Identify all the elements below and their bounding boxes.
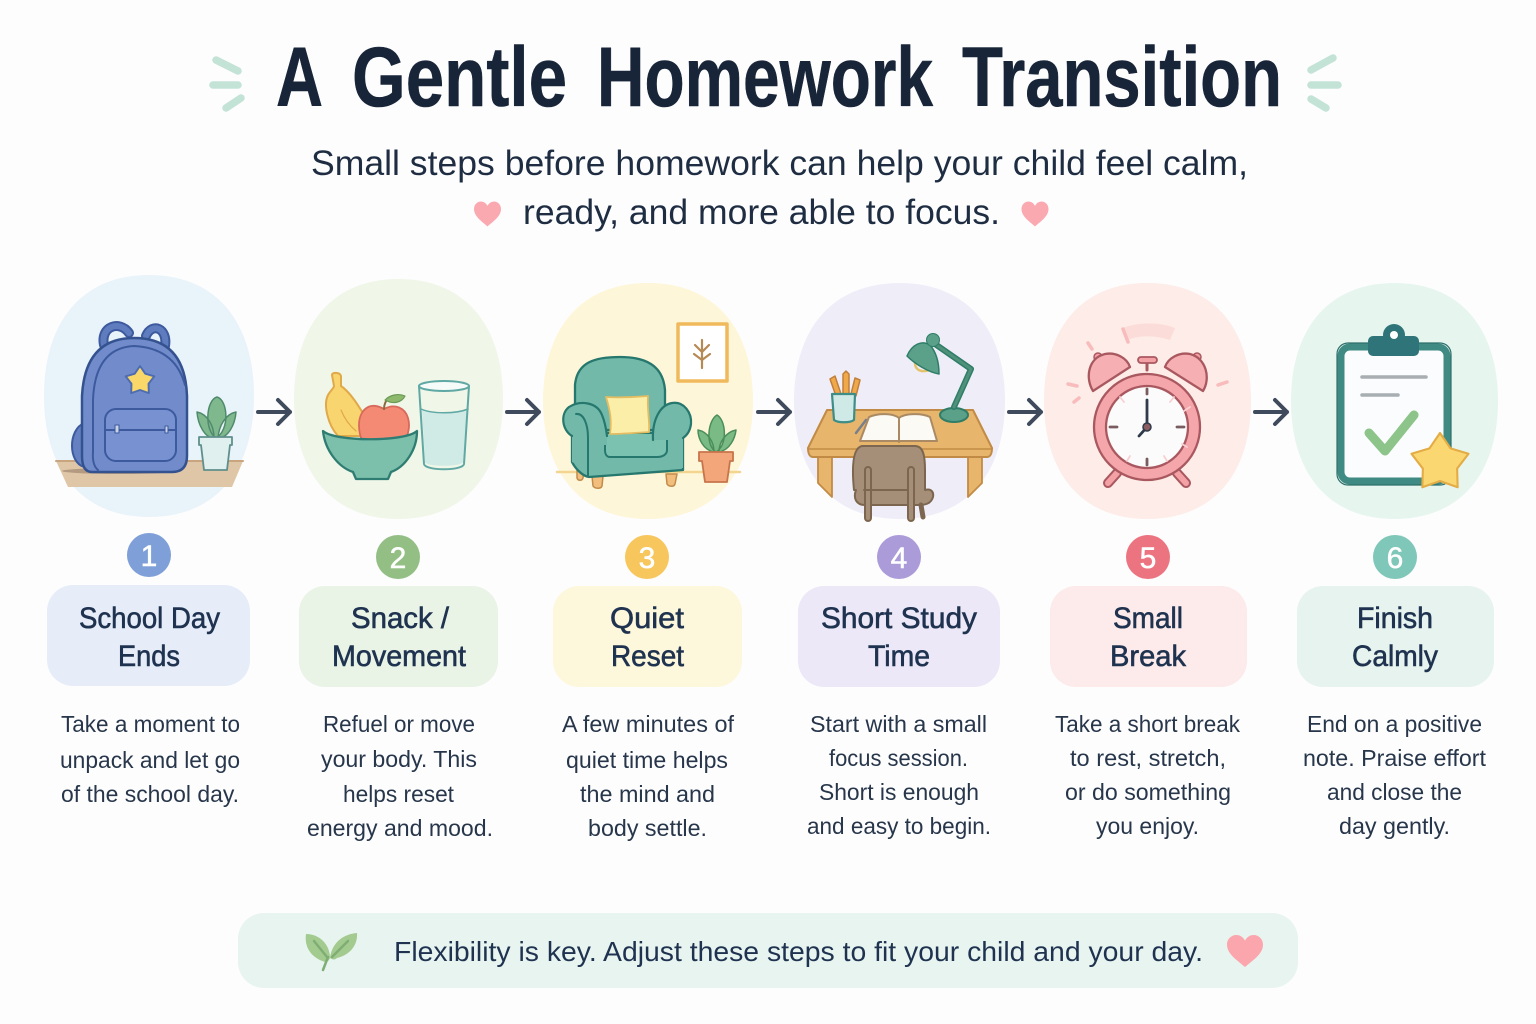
footer message: Flexibility is key. Adjust these steps to fit your child and your day. — [394, 936, 1203, 967]
step description 6 — [1303, 711, 1487, 839]
number badge 3: 3 — [639, 542, 655, 575]
panel: step 5 small break — [1044, 283, 1251, 519]
icon: alarm clock — [1068, 324, 1227, 483]
step description 4: Start with a small — [810, 711, 987, 737]
step description 2: energy and mood. — [307, 815, 493, 841]
icon: right title sparkle — [1311, 58, 1338, 108]
number badge 5 — [1126, 535, 1170, 579]
step label card 1 — [47, 585, 250, 686]
step description 3: body settle. — [588, 815, 707, 841]
number badge 1: 1 — [141, 540, 157, 573]
illustration background blob 4 — [794, 283, 1005, 519]
icon: heart left — [474, 202, 501, 226]
icon: heart right — [1022, 202, 1048, 226]
title: A — [276, 30, 323, 124]
title — [276, 30, 1282, 124]
arrow 4 to 5 — [1009, 400, 1041, 424]
step description 3 — [562, 711, 735, 841]
step label card 1: School Day — [79, 602, 220, 635]
icon: fruit bowl and water glass — [323, 373, 469, 479]
step description 1 — [60, 711, 240, 807]
illustration background blob 5 — [1044, 283, 1251, 519]
step label card 2: Movement — [332, 640, 467, 673]
illustration background blob 6 — [1291, 283, 1498, 519]
arrow 5 to 6 — [1255, 400, 1287, 424]
step description 3: the mind and — [580, 781, 715, 807]
callout: flexibility footer bar — [238, 913, 1298, 988]
step description 2: Refuel or move — [323, 711, 475, 737]
arrow 1 to 2 — [258, 400, 290, 424]
number badge 1 — [127, 533, 171, 577]
step description 4: and easy to begin. — [807, 813, 991, 839]
step label card 2 — [299, 586, 498, 687]
number badge 6: 6 — [1387, 542, 1403, 575]
illustration background blob 3 — [543, 283, 753, 519]
step description 4 — [807, 711, 991, 839]
step description 6: day gently. — [1339, 813, 1450, 839]
arrow 2 to 3 — [507, 400, 539, 424]
step description 6: End on a positive — [1307, 711, 1482, 737]
number badge 4 — [877, 535, 921, 579]
subtitle: ready, and more able to focus. — [523, 193, 1000, 232]
step label card 6: Calmly — [1352, 640, 1438, 673]
step label card 4: Time — [868, 640, 930, 673]
title: Transition — [962, 30, 1282, 124]
step description 3: quiet time helps — [566, 747, 728, 773]
panel: step 3 quiet reset — [543, 283, 753, 519]
step label card 5: Break — [1110, 640, 1187, 673]
step description 5: to rest, stretch, — [1070, 745, 1226, 771]
step label card 6: Finish — [1357, 602, 1433, 635]
step description 5: you enjoy. — [1096, 813, 1199, 839]
panel: step 2 snack movement — [294, 279, 503, 519]
number badge 6 — [1373, 535, 1417, 579]
illustration background blob 1 — [44, 275, 254, 517]
icon: footer heart — [1227, 935, 1263, 967]
panel: step 4 short study time — [794, 283, 1005, 519]
step description 3: A few minutes of — [562, 711, 735, 737]
number badge 2 — [376, 535, 420, 579]
step label card 2: Snack / — [351, 602, 450, 635]
step label card 3: Quiet — [610, 602, 685, 635]
step description 6: and close the — [1327, 779, 1462, 805]
panel: step 1 school day ends — [44, 275, 254, 517]
step label card 1: Ends — [118, 640, 180, 673]
panel: step 6 finish calmly — [1291, 283, 1498, 519]
step description 2: helps reset — [343, 781, 455, 807]
step description 1: Take a moment to — [61, 711, 240, 737]
icon: green sprout — [306, 933, 357, 970]
icon: backpack on desk — [56, 326, 243, 487]
step description 5 — [1055, 711, 1240, 839]
number badge 5: 5 — [1140, 542, 1156, 575]
step label card 5 — [1050, 586, 1247, 687]
step label card 3: Reset — [611, 640, 685, 673]
number badge 4: 4 — [891, 542, 907, 575]
title: Homework — [597, 30, 933, 124]
number badge 3 — [625, 535, 669, 579]
step description 4: focus session. — [829, 745, 968, 771]
step description 5: Take a short break — [1055, 711, 1240, 737]
step label card 3 — [553, 586, 742, 687]
icon: armchair, picture and plant — [557, 324, 740, 488]
arrow 3 to 4 — [758, 400, 790, 424]
icon: desk, book, lamp and chair — [808, 334, 992, 518]
step description 1: of the school day. — [61, 781, 239, 807]
step description 2: your body. This — [321, 746, 477, 772]
illustration background blob 2 — [294, 279, 503, 519]
step description 4: Short is enough — [819, 779, 979, 805]
step label card 4 — [798, 586, 1000, 687]
step description 6: note. Praise effort — [1303, 745, 1487, 771]
step label card 4: Short Study — [821, 602, 977, 635]
step description 1: unpack and let go — [60, 747, 240, 773]
step description 2 — [307, 711, 493, 841]
number badge 2: 2 — [390, 542, 406, 575]
title: Gentle — [352, 30, 567, 124]
icon: clipboard with check and star — [1337, 324, 1469, 487]
icon: left title sparkle — [213, 60, 241, 108]
step label card 6 — [1297, 586, 1494, 687]
step description 5: or do something — [1065, 779, 1231, 805]
subtitle — [311, 144, 1248, 232]
subtitle: Small steps before homework can help your child feel calm, — [311, 144, 1248, 183]
step label card 5: Small — [1113, 602, 1183, 635]
